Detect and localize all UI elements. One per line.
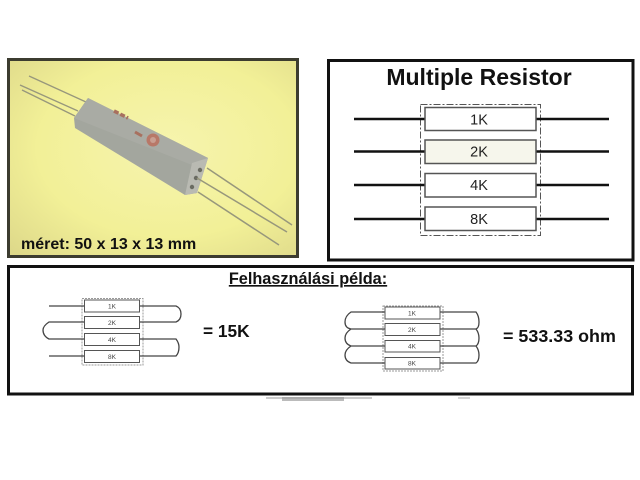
parallel wiring diagram: 2K (408, 327, 417, 334)
resistor 4K (425, 174, 536, 197)
panel: product photo (8, 60, 298, 256)
panel: multiple resistor diagram (328, 60, 633, 260)
scan artifacts below panel (266, 397, 470, 401)
small resistor labels (385, 307, 440, 369)
series wiring diagram: 4K (108, 337, 117, 344)
resistor 1K: 1K (470, 112, 488, 128)
resistor 4K: 4K (470, 178, 488, 194)
resistor 8K: 8K (470, 212, 488, 228)
panel: usage examples (8, 266, 632, 394)
series wiring diagram (43, 298, 181, 365)
heading: Multiple Resistor (386, 64, 572, 90)
icon: front resistor leads (197, 168, 292, 245)
series result: = 15K (203, 321, 250, 341)
examples heading: Felhasználási példa: (229, 270, 387, 288)
resistor 1K (425, 108, 536, 130)
icon: resistor body (74, 98, 208, 195)
series wiring diagram: 8K (108, 354, 117, 361)
resistor leads (354, 119, 609, 219)
resistor 8K (425, 207, 536, 230)
small resistor labels (84, 300, 140, 362)
series wiring diagram: 1K (108, 304, 117, 310)
icon: rear resistor leads (20, 76, 86, 116)
parallel wiring diagram: 8K (408, 360, 417, 368)
resistor 2K: 2K (470, 144, 488, 160)
parallel wiring diagram: 1K (408, 310, 417, 318)
parallel wiring diagram: 4K (408, 344, 417, 350)
series wiring diagram: 2K (108, 320, 117, 327)
parallel result: = 533.33 ohm (503, 326, 616, 346)
dimensions caption: méret: 50 x 13 x 13 mm (21, 236, 196, 253)
dashed package outline (420, 104, 540, 236)
parallel wiring diagram (345, 306, 479, 371)
resistor 2K (425, 140, 536, 164)
